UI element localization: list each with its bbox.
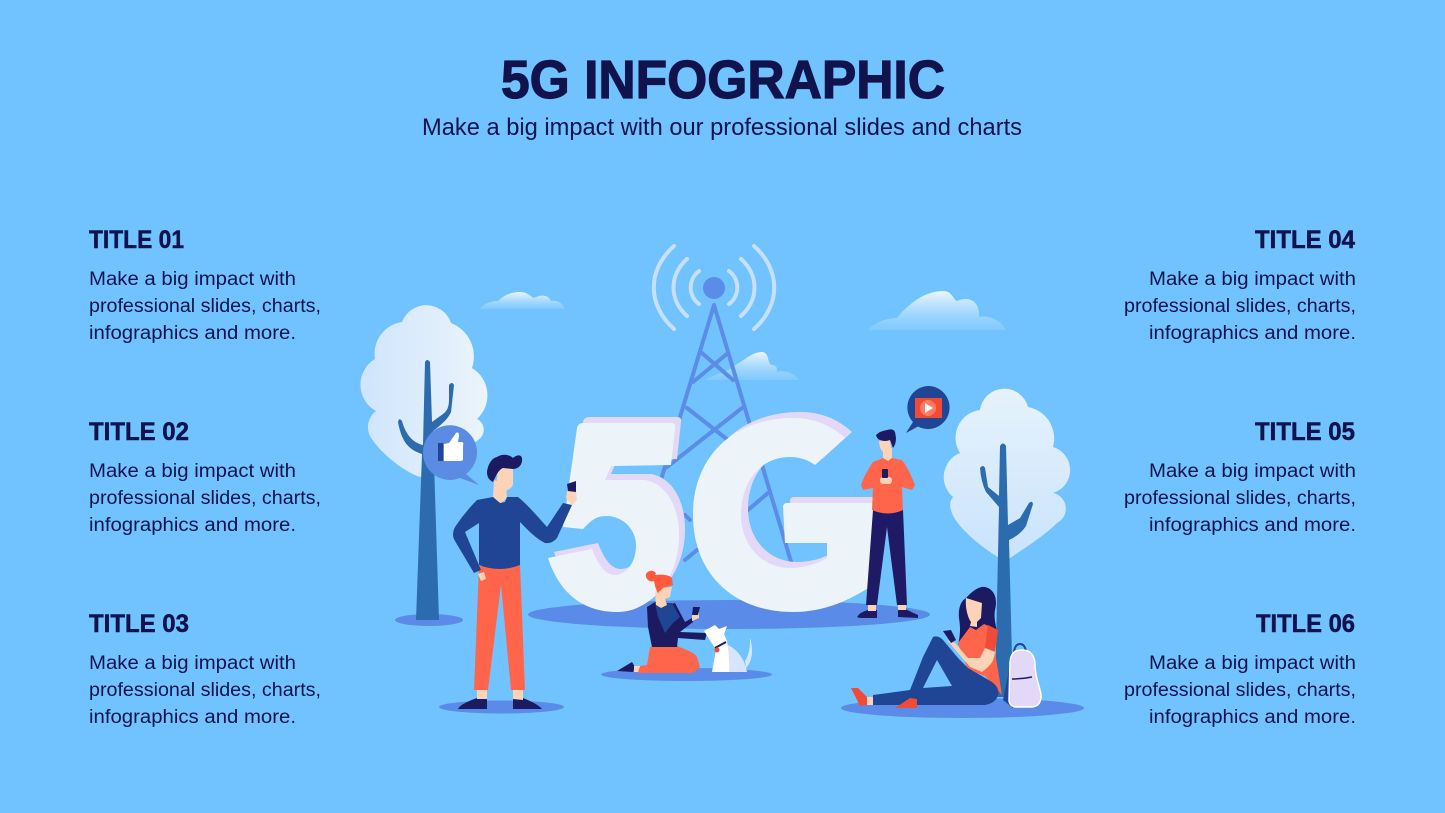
body: title 06 — [1124, 653, 1356, 728]
icon: like bubble — [423, 425, 479, 485]
body: title 04: Make a big impact with — [1149, 269, 1356, 290]
body: title 06: infographics and more. — [1149, 707, 1356, 728]
ground: sitting woman shadow — [841, 698, 1084, 718]
body: title 03 — [89, 653, 321, 728]
icon: video bubble — [906, 386, 950, 433]
body: title 04 — [1124, 269, 1356, 344]
body: title 04: professional slides, charts, — [1124, 296, 1356, 317]
shoe right — [895, 698, 917, 708]
body: title 06: professional slides, charts, — [1124, 680, 1356, 701]
icon: dog — [704, 625, 752, 672]
face — [496, 468, 513, 491]
text block: title 01 — [89, 226, 321, 344]
icon: cloud small left — [480, 292, 565, 309]
text block: title 05 — [1124, 418, 1356, 536]
text block: title 02 — [89, 418, 321, 536]
shoes — [857, 609, 918, 618]
ankle — [866, 697, 873, 705]
tree canopy left — [360, 305, 487, 477]
title: 5G INFOGRAPHIC — [501, 50, 945, 110]
trousers — [873, 636, 998, 705]
body: title 05: infographics and more. — [1149, 515, 1356, 536]
phone — [943, 630, 956, 643]
torso — [647, 602, 707, 647]
thumb up — [444, 432, 463, 461]
raised hand — [566, 491, 577, 505]
sweater — [453, 497, 572, 573]
body: title 05 — [1124, 461, 1356, 536]
body: title 02: infographics and more. — [89, 515, 296, 536]
play triangle — [925, 403, 933, 413]
icon: cloud large right — [868, 291, 1006, 330]
body: title 03: professional slides, charts, — [89, 680, 321, 701]
heading: title 06: TITLE 06 — [1256, 610, 1355, 638]
face — [879, 440, 892, 455]
illustration: 5G scene — [360, 246, 1084, 718]
phone — [567, 481, 576, 492]
body: title 04: infographics and more. — [1149, 323, 1356, 344]
text block: title 03 — [89, 610, 321, 728]
person: man with video bubble — [857, 429, 918, 618]
body: title 03: infographics and more. — [89, 707, 296, 728]
face — [966, 598, 982, 627]
hair — [876, 429, 896, 448]
shoes — [458, 698, 542, 709]
play disc — [920, 400, 936, 416]
heading: title 03: TITLE 03 — [89, 610, 189, 638]
pack body — [1009, 650, 1041, 707]
hair — [487, 455, 522, 482]
big 5G letters — [548, 412, 880, 612]
hair — [958, 587, 997, 645]
body: title 05: Make a big impact with — [1149, 461, 1356, 482]
tree trunk right — [980, 444, 1033, 697]
icon: cloud behind tower — [705, 352, 799, 380]
top centre — [655, 603, 680, 633]
hands — [880, 477, 892, 484]
letter 5 — [548, 417, 685, 612]
body: title 02: professional slides, charts, — [89, 488, 321, 509]
text block: title 04 — [1124, 226, 1356, 344]
skirt — [638, 646, 700, 673]
hand on hip — [478, 572, 486, 581]
hand — [692, 612, 699, 621]
tree left — [360, 305, 487, 620]
phone — [692, 607, 700, 615]
bubble — [906, 386, 950, 433]
heading: title 04: TITLE 04 — [1255, 226, 1355, 254]
bubble — [423, 425, 479, 485]
ankles — [477, 690, 523, 700]
neck — [883, 448, 892, 462]
ground: main shadow — [528, 600, 930, 629]
phone — [882, 469, 888, 478]
tag — [714, 648, 720, 652]
heading: title 05: TITLE 05 — [1255, 418, 1355, 446]
heading: title 01: TITLE 01 — [89, 226, 184, 254]
ground: kneeling woman shadow — [601, 668, 772, 681]
body: title 01: Make a big impact with — [89, 269, 296, 290]
icon: backpack — [1003, 644, 1041, 708]
hair — [646, 571, 673, 593]
video screen — [915, 398, 942, 418]
tree right — [944, 389, 1070, 697]
ground: man shadow — [439, 700, 564, 714]
tower lattice — [660, 305, 792, 565]
body: title 03: Make a big impact with — [89, 653, 296, 674]
ground: tree left shadow — [395, 614, 463, 626]
tower beacon — [703, 277, 725, 299]
text block: title 06 — [1124, 610, 1356, 728]
face — [655, 587, 672, 608]
heading: title 02: TITLE 02 — [89, 418, 189, 446]
body: title 02 — [89, 461, 321, 536]
letter G — [693, 412, 880, 612]
person: sitting woman — [851, 587, 1002, 708]
sleeve — [985, 625, 998, 651]
icon: signal tower — [654, 246, 792, 565]
shirt — [958, 624, 1002, 695]
dog back — [724, 638, 752, 672]
neck — [493, 480, 507, 504]
person: kneeling woman — [617, 571, 707, 673]
body: title 02: Make a big impact with — [89, 461, 296, 482]
person: man with phone — [453, 455, 577, 709]
foot — [617, 662, 635, 672]
trousers — [474, 564, 525, 690]
tree canopy right — [944, 389, 1070, 560]
handle — [1014, 644, 1026, 652]
ankle — [634, 666, 640, 672]
strap — [1003, 661, 1013, 708]
dog body — [704, 625, 729, 672]
ankles — [868, 604, 906, 611]
trousers — [866, 510, 907, 605]
thumb sleeve — [438, 443, 443, 461]
subtitle: Make a big impact with our professional slides and charts — [422, 114, 1022, 141]
body: title 01 — [89, 269, 321, 344]
arm — [947, 640, 995, 672]
shoe left — [851, 688, 867, 706]
signal waves — [654, 246, 774, 329]
pack zip — [1012, 677, 1032, 679]
body: title 05: professional slides, charts, — [1124, 488, 1356, 509]
shirt — [861, 458, 915, 514]
body: title 06: Make a big impact with — [1149, 653, 1356, 674]
body: title 01: infographics and more. — [89, 323, 296, 344]
tree trunk left — [398, 360, 454, 620]
collar — [715, 642, 726, 648]
body: title 01: professional slides, charts, — [89, 296, 321, 317]
